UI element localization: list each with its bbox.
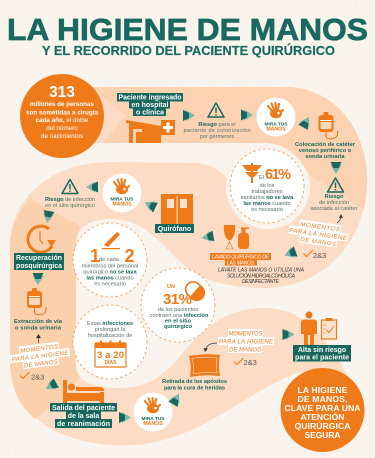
hand badge 1: MANOS: [266, 126, 286, 132]
title: Y EL RECORRIDO DEL PACIENTE QUIRÚRGICO: [42, 43, 335, 58]
arrow: [142, 197, 158, 213]
arrow: [86, 182, 98, 192]
hand badge 1: [256, 98, 296, 136]
31% callout: UN: [167, 284, 175, 290]
catheter placement text: sonda urinaria: [305, 154, 345, 160]
1 in 2 callout: de cada: [99, 257, 120, 263]
surgical hand washing block: LAVADO QUIRÚRGICO DE: [212, 254, 270, 260]
orange stat circle: 313 million: de nacimientos: [41, 133, 83, 140]
1 in 2 callout: 1: [90, 246, 100, 266]
risk of surgical site infection: Riesgo de infección: [45, 197, 95, 203]
hand hygiene moments note 3: DE MANOS: [229, 348, 261, 354]
hand badge 3: [134, 392, 172, 432]
hand hygiene moments note 2: DE MANOS: [24, 359, 58, 369]
orange stat circle: 313 million: millones de personas: [30, 101, 94, 108]
infection stay callout: hospitalización de: [88, 333, 132, 339]
dressing removal text: Retirada de los apósitos: [162, 379, 227, 385]
hand hygiene moments note 2: MOMENTOS: [20, 344, 58, 355]
label: discharge from recovery: [50, 403, 117, 428]
orange stat circle: 313 million: son sometidas a cirugía: [26, 110, 98, 116]
icon: hospital: [126, 120, 175, 143]
operating room: Quirófano: [158, 226, 191, 233]
surgical hand washing block: LAS MANOS:: [227, 260, 256, 266]
final orange conclusion circle: LA HIGIENE: [298, 385, 348, 395]
infection stay callout: 3 a 20: [97, 350, 124, 361]
label: patient admitted: en hospital: [132, 102, 169, 109]
61% callout: las manos cuando: [243, 201, 291, 207]
hand hygiene moments note 3: PARA LA HIGIENE: [219, 340, 274, 346]
hand badge 2: [102, 174, 142, 212]
hand hygiene moments note 2: PARA LA HIGIENE: [11, 350, 70, 363]
hand hygiene moments note 3: MOMENTOS: [228, 332, 262, 338]
surgical hand washing block: DESINFECTANTE: [242, 279, 280, 285]
icon: recovery clock: [28, 226, 56, 252]
orange stat circle: 313 million: cada año, el doble: [36, 117, 89, 124]
31% callout: en el sitio: [165, 318, 192, 324]
arrow: [241, 110, 253, 120]
hand hygiene moments note 2: [9, 340, 71, 382]
arrow: [43, 378, 59, 394]
surgical hand washing block: SOLUCIÓN HIDROALCOHÓLICA: [227, 272, 296, 280]
catheter removal text: Extracción de vía: [14, 319, 63, 325]
dressing removal text: para la cura de heridas: [164, 386, 225, 392]
icon: bed: [63, 380, 104, 404]
label: post-surgical recovery: posquirúrgica: [16, 263, 62, 270]
catheter infection risk: [311, 178, 358, 212]
catheter infection risk: de infección: [319, 200, 349, 206]
1 in 2 callout: miembros del personal: [82, 264, 138, 270]
orange stat circle: 313 million: del número: [46, 125, 78, 132]
surgical hand washing block: LÁVATE LAS MANOS O UTILIZA UNA: [218, 266, 305, 274]
hand hygiene moments note 1: DE MANOS: [300, 237, 336, 248]
61% callout: de los: [260, 183, 275, 189]
61% callout: El: [259, 175, 264, 181]
hand hygiene moments note 1: MOMENTOS: [300, 222, 340, 233]
hand hygiene moments note 1: [287, 214, 350, 260]
orange stat circle: 313 million: [20, 74, 104, 158]
1 in 2 callout: 2: [124, 246, 135, 266]
hand hygiene moments note 1: PARA LA HIGIENE: [289, 228, 348, 242]
final orange conclusion circle: [280, 368, 364, 452]
final orange conclusion circle: SEGURA: [304, 430, 340, 440]
label: patient admitted: Paciente ingresado: [118, 94, 182, 102]
61% callout: es necesario: [251, 207, 283, 213]
label: discharge without risk: [293, 345, 351, 362]
risk of colonization: Riesgo para el: [198, 122, 236, 128]
final orange conclusion circle: DE MANOS,: [298, 394, 348, 404]
catheter placement text: [295, 142, 356, 160]
final orange conclusion circle: QUIRÚRGICA: [294, 420, 350, 431]
catheter placement text: venoso periférico o: [299, 148, 352, 154]
arrow: [168, 391, 184, 407]
hand badge 3: MANOS: [143, 421, 163, 427]
hand badge 2: MANOS: [112, 202, 132, 208]
61% callout: trabajadores: [251, 189, 283, 195]
catheter removal text: [14, 319, 63, 343]
infection stay callout: prolongan la: [95, 327, 126, 333]
icon: catheter bag: [318, 112, 338, 139]
label: post-surgical recovery: Recuperación: [16, 255, 62, 262]
arrow: [330, 162, 342, 174]
final orange conclusion circle: ATENCIÓN: [300, 411, 344, 422]
label: post-surgical recovery: [14, 253, 64, 270]
hand hygiene moments note 3: 2&3: [244, 358, 257, 367]
61% callout: [230, 149, 304, 223]
label: patient admitted: [117, 93, 183, 116]
surgical hand washing block: [210, 225, 305, 285]
icon: dressing pad: [189, 354, 220, 377]
infection stay callout: [73, 305, 147, 379]
hand hygiene moments note 1: 2&3: [313, 251, 326, 260]
hand badge 3: MIRA TUS: [141, 416, 165, 422]
1 in 2 callout: [73, 223, 147, 297]
31% callout: de los pacientes: [158, 307, 198, 313]
infection stay callout: DÍAS: [105, 358, 117, 366]
arrow: [183, 110, 195, 121]
dressing removal text: [162, 379, 227, 392]
1 in 2 callout: las manos cuando: [86, 276, 134, 282]
label: discharge from recovery: de reanimación: [57, 421, 110, 428]
catheter removal text: o sonda urinaria: [15, 326, 62, 332]
hand badge 2: MIRA TUS: [110, 196, 134, 202]
arrow: [42, 210, 54, 224]
risk of colonization: [184, 103, 250, 140]
hand badge 1: MIRA TUS: [264, 122, 288, 128]
final orange conclusion circle: CLAVE PARA UNA: [284, 403, 360, 413]
operating room: [155, 194, 194, 233]
orange stat circle: 313 million: 313: [49, 84, 75, 101]
1 in 2 callout: es necesario: [94, 282, 126, 288]
arrow: [201, 231, 214, 243]
catheter infection risk: Riesgo: [325, 194, 344, 200]
icon: person: [301, 312, 317, 345]
31% callout: quirúrgico: [164, 324, 193, 330]
label: discharge without risk: Alta sin riesgo: [298, 347, 346, 354]
risk of surgical site infection: [45, 180, 95, 209]
catheter placement text: Colocación de catéter: [295, 142, 356, 148]
label: discharge from recovery: Salida del paciente: [52, 405, 115, 412]
catheter infection risk: asociada al catéter: [311, 206, 358, 212]
label: discharge without risk: para el paciente: [295, 354, 349, 362]
infection stay callout: Estas infecciones: [87, 321, 133, 327]
arrow: [282, 329, 294, 340]
risk of colonization: por gérmenes: [200, 134, 234, 140]
hand hygiene moments note 3: [204, 329, 274, 367]
risk of surgical site infection: en el sitio quirúrgico: [45, 203, 95, 209]
31% callout: contraen una infección: [150, 313, 209, 319]
61% callout: 61%: [265, 167, 291, 183]
peach patient pathway band: [10, 87, 367, 445]
arrow: [282, 246, 298, 261]
label: patient admitted: o clínica: [136, 109, 164, 116]
61% callout: sanitarios no se lava: [241, 195, 294, 201]
arrow: [32, 273, 44, 285]
label: discharge from recovery: de la sala: [68, 413, 99, 420]
title: LA HIGIENE DE MANOS: [7, 12, 368, 47]
arrow: [119, 412, 131, 423]
hand hygiene moments note 2: 2&3: [31, 372, 44, 382]
arrow: [298, 114, 314, 130]
1 in 2 callout: quirúrgico no se lava: [83, 270, 137, 276]
icon: clipboard: [322, 318, 336, 339]
31% callout: 31%: [163, 291, 192, 308]
31% callout: [141, 268, 215, 342]
risk of colonization: paciente de colonización: [184, 128, 250, 134]
icon: urinary bag: [27, 288, 46, 315]
